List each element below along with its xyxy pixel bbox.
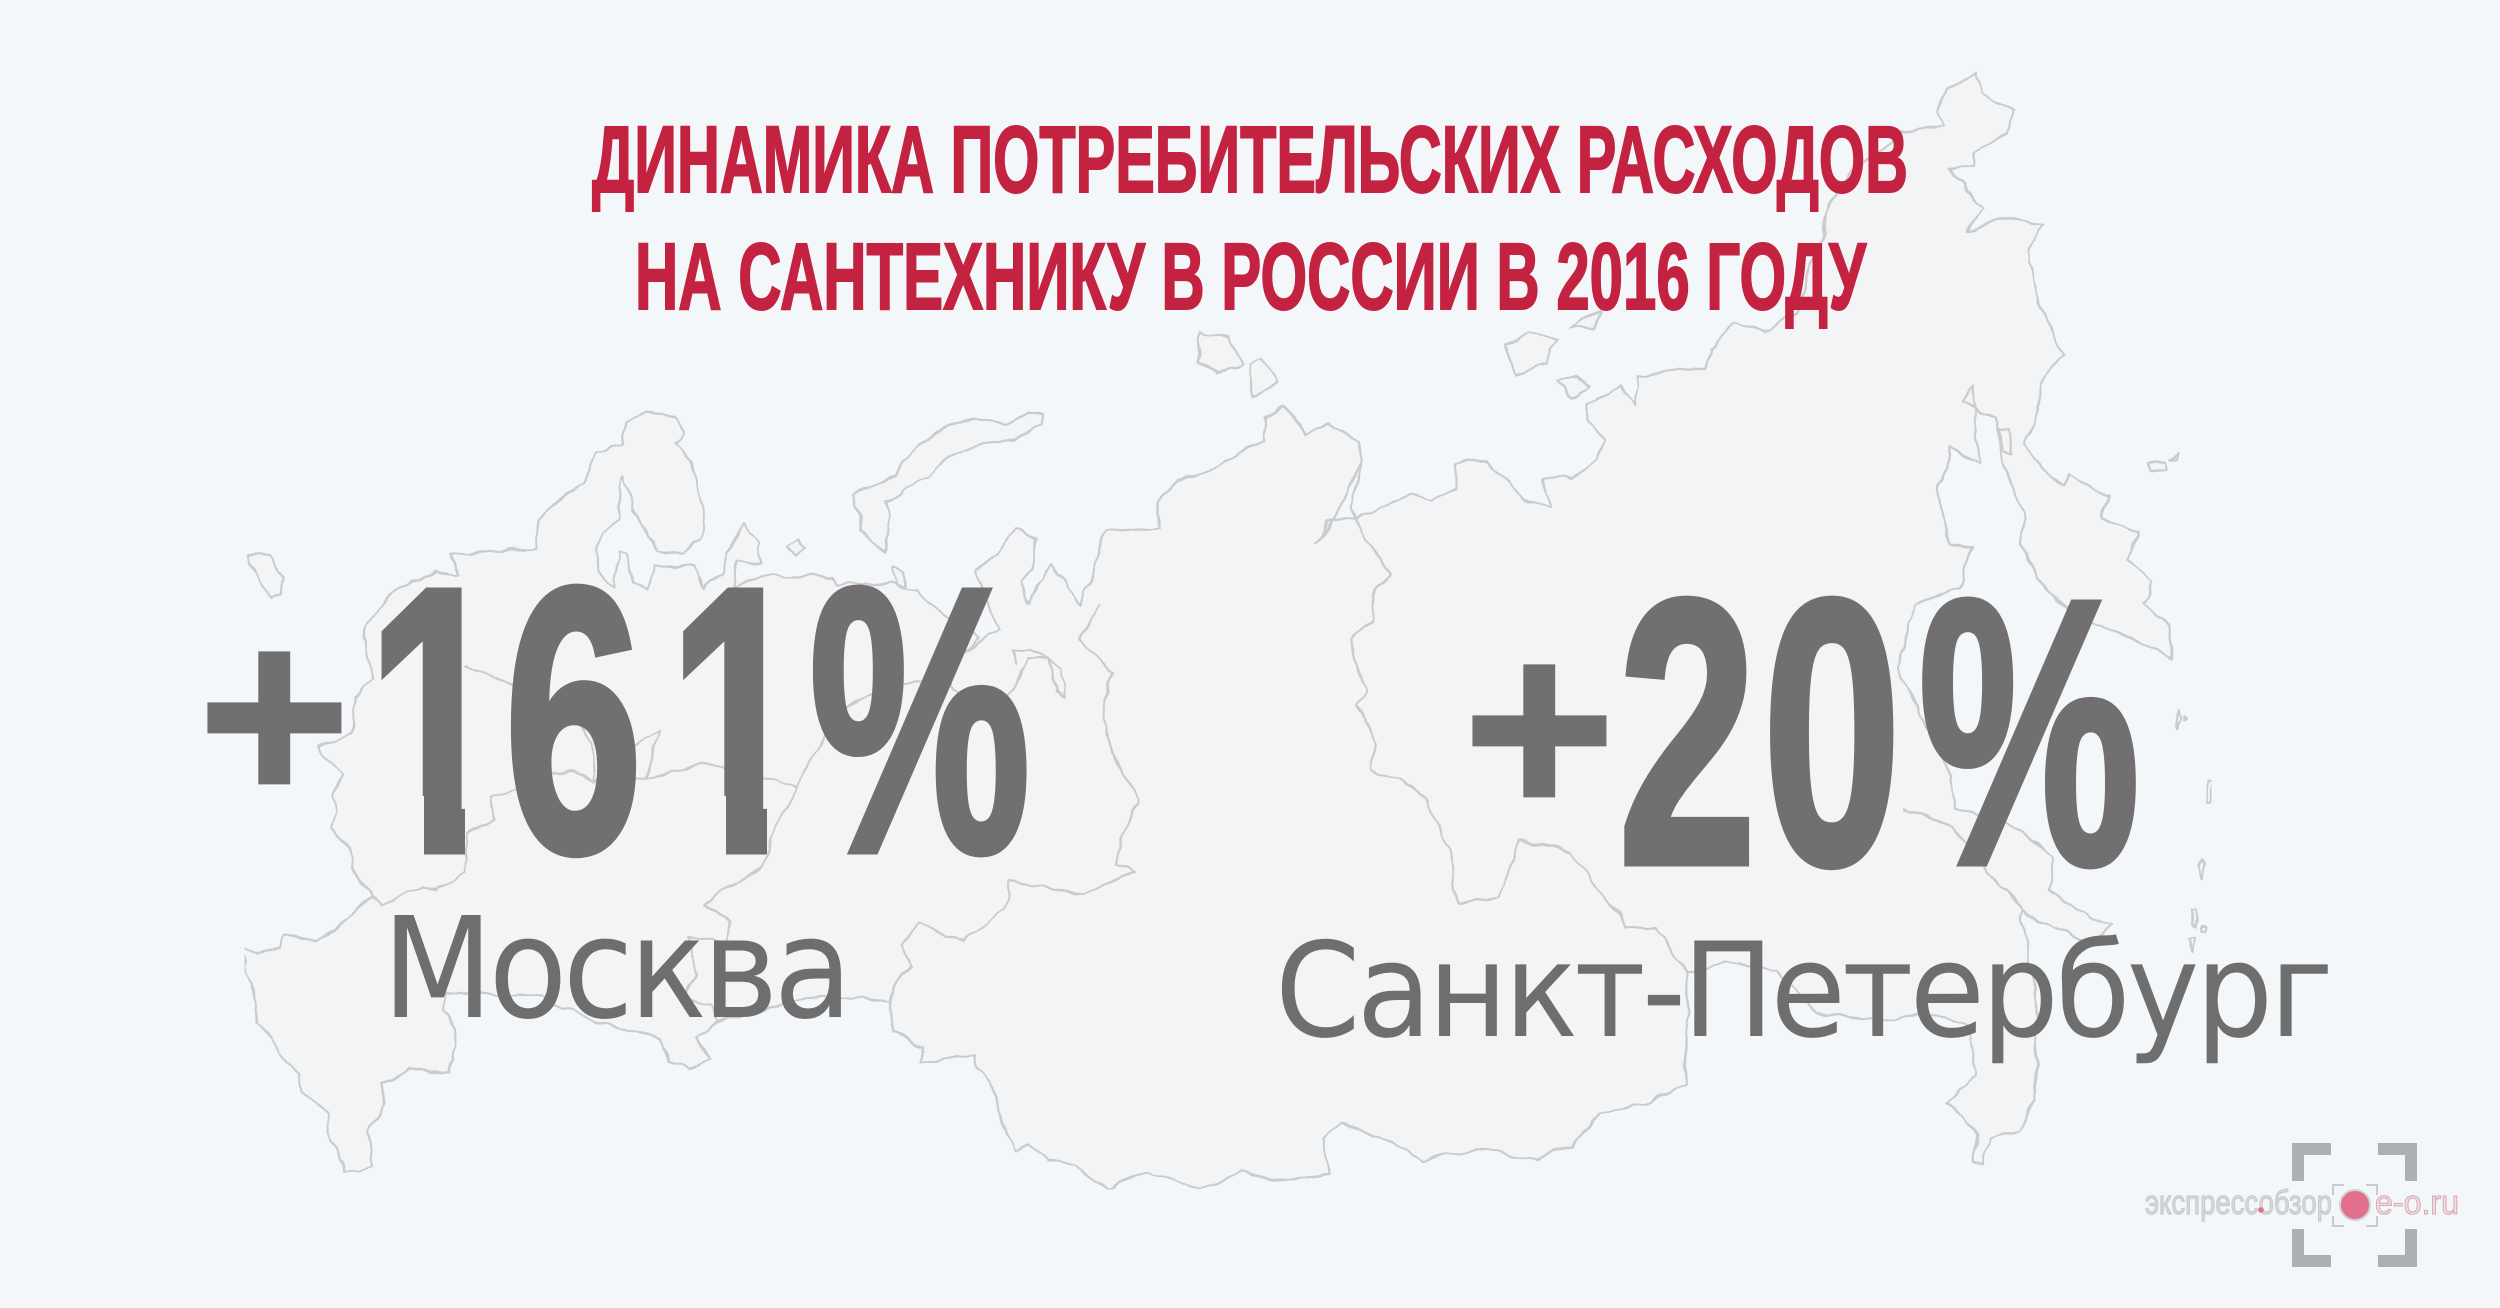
value +20%: + [1463, 584, 1616, 870]
value +20%: 20% [1618, 521, 2140, 943]
corner brackets [2292, 1143, 2417, 1267]
title [592, 107, 1908, 330]
label Moscow: Москва [382, 888, 848, 1051]
inner brackets [2333, 1185, 2377, 1226]
label Saint Petersburg: Санкт-Петербург [1275, 914, 2330, 1067]
arctic and pacific islands [247, 309, 2211, 953]
value +161%: 161% [367, 509, 1031, 931]
red circle [2340, 1190, 2370, 1220]
logo wordmark: экспрессобзор [2145, 1184, 2332, 1222]
domain: e-o.ru [2375, 1184, 2459, 1222]
value +161%: + [198, 571, 351, 857]
background map of Russia [245, 71, 2211, 1189]
stat: Moscow +161% [207, 584, 1027, 1019]
stat: Saint Petersburg +20% [1275, 521, 2330, 1067]
logo: express review [2145, 1143, 2459, 1267]
dot [2258, 1207, 2264, 1213]
value +161% [207, 584, 1027, 858]
